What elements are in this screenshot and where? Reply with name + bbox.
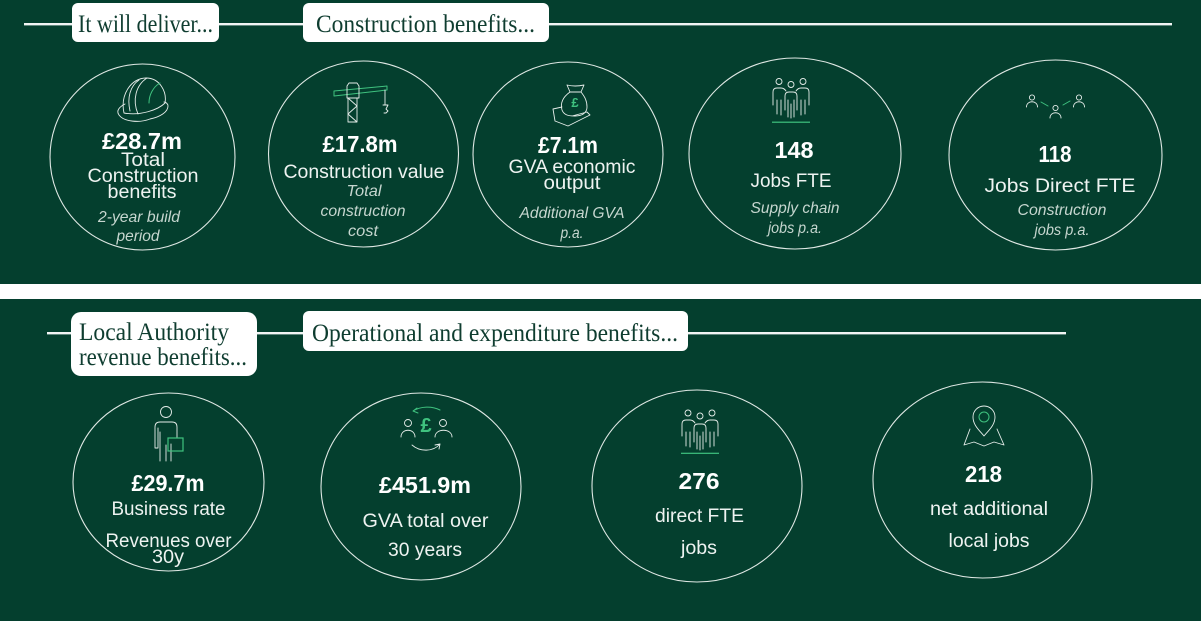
heading: Construction benefits: Construction benefits... (316, 11, 535, 38)
panel: direct FTE jobs: jobs (680, 538, 717, 559)
panel: GVA economic output: GVA economic (508, 157, 636, 178)
panel: jobs direct FTE: Construction (1018, 202, 1107, 219)
panel: construction value: £17.8m (322, 131, 398, 157)
icon: crane (334, 83, 388, 122)
panel: construction value (268, 61, 458, 247)
panel: net additional local jobs: 218 (965, 461, 1002, 487)
icon: pound sign: £ (420, 415, 432, 437)
panel: business rate (73, 393, 264, 571)
icon: money bag on hand (553, 85, 590, 126)
icon: hard hat (118, 78, 168, 121)
panel: GVA total: GVA total over (362, 511, 489, 532)
panel: net additional local jobs: local jobs (948, 531, 1030, 552)
panel: net additional local jobs (873, 382, 1092, 578)
panel: business rate: 30y (152, 547, 185, 568)
panel: GVA economic output: p.a. (560, 225, 584, 242)
icon: three people (682, 410, 718, 450)
panel: GVA economic output (473, 62, 663, 247)
heading: Construction benefits (303, 3, 549, 42)
panel: construction value: Total (346, 183, 382, 200)
panel: total construction benefits: Construction (88, 166, 198, 187)
icon: map pin (964, 406, 1004, 446)
panel: GVA total: 30 years (388, 540, 462, 561)
panel: construction value: Construction value (284, 162, 444, 183)
panel: GVA total (321, 393, 521, 580)
heading: Local Authority revenue benefits: revenue benefits... (79, 344, 247, 371)
icon: three people (773, 78, 809, 118)
panel: jobs FTE supply chain: jobs p.a. (766, 220, 822, 237)
panel: jobs FTE supply chain: Supply chain (750, 200, 840, 217)
panel: GVA total: £451.9m (379, 472, 471, 498)
icon: connected people (1026, 95, 1084, 118)
heading: It will deliver (72, 3, 219, 42)
panel: business rate: Revenues over (106, 531, 232, 552)
heading: Operational and expenditure benefits (303, 311, 688, 351)
heading: Local Authority revenue benefits: Local Authority (79, 319, 229, 346)
panel: total construction benefits: £28.7m (102, 128, 182, 154)
heading: Operational and expenditure benefits: Operational and expenditure benefits... (312, 320, 678, 347)
panel: GVA economic output: £7.1m (538, 132, 598, 158)
panel: jobs direct FTE: jobs p.a. (1033, 222, 1090, 239)
icon: people exchanging pounds (401, 407, 452, 450)
panel: jobs direct FTE (949, 60, 1162, 250)
panel: total construction benefits (50, 64, 235, 250)
panel: direct FTE jobs: direct FTE (655, 506, 744, 527)
heading: It will deliver: It will deliver... (78, 11, 213, 38)
panel: construction value: cost (348, 223, 379, 240)
icon: pound sign: £ (571, 95, 579, 110)
panel: jobs FTE supply chain: 148 (774, 137, 814, 163)
panel: GVA economic output: Additional GVA (519, 205, 624, 222)
panel: direct FTE jobs: 276 (678, 468, 720, 494)
panel: jobs direct FTE: 118 (1038, 141, 1072, 167)
panel: jobs FTE supply chain (689, 58, 901, 249)
heading: Local Authority revenue benefits (71, 312, 257, 376)
panel: net additional local jobs: net additional (930, 499, 1048, 520)
panel: total construction benefits: 2-year build (97, 209, 181, 226)
panel: GVA economic output: output (544, 173, 601, 194)
panel: total construction benefits: benefits (108, 182, 176, 203)
panel: jobs FTE supply chain: Jobs FTE (750, 171, 832, 192)
panel: business rate: Business rate (112, 499, 226, 520)
panel: direct FTE jobs (592, 390, 802, 582)
panel: jobs direct FTE: Jobs Direct FTE (984, 176, 1136, 197)
panel: business rate: £29.7m (132, 470, 204, 496)
panel: total construction benefits: Total (121, 150, 165, 171)
panel: total construction benefits: period (116, 228, 161, 245)
icon: person with briefcase (155, 406, 183, 461)
panel: construction value: construction (320, 203, 406, 220)
